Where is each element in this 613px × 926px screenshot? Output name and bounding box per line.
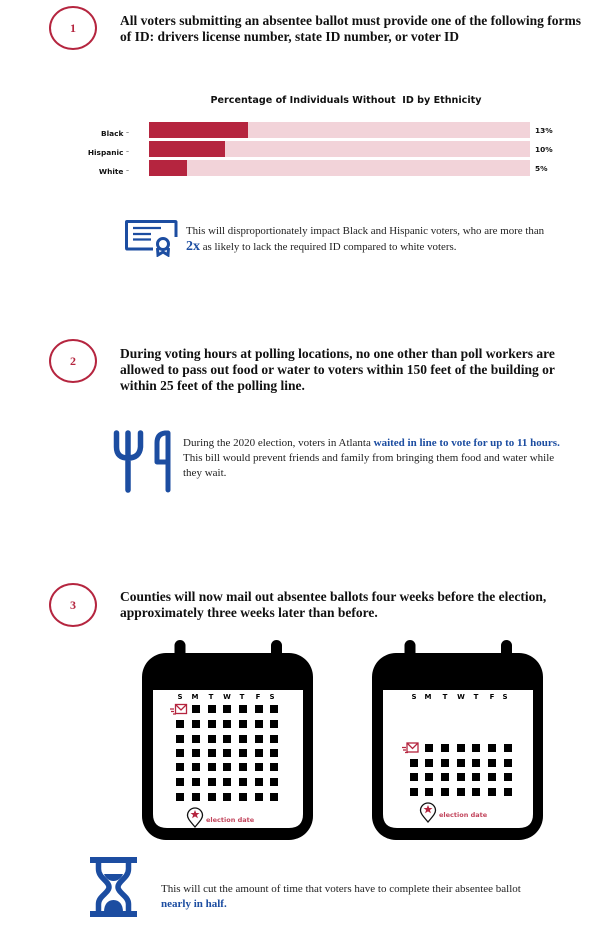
calendar: after: W xyxy=(457,693,465,701)
step 2 number badge: 2 xyxy=(70,354,76,368)
calendar: before: W xyxy=(223,693,231,701)
step 1 heading: of ID: drivers license number, state ID number, or voter ID xyxy=(120,29,459,44)
step 1 heading xyxy=(120,13,581,44)
calendar: before: election date xyxy=(206,816,255,824)
row: White 5%: White – xyxy=(99,167,129,176)
calendar: before: S xyxy=(177,693,183,701)
row: White 5% xyxy=(99,160,548,176)
calendar: after: election date xyxy=(439,811,488,819)
calendar: after: T xyxy=(443,693,448,701)
calendar: before: T xyxy=(209,693,214,701)
step 3 heading xyxy=(120,589,546,620)
calendar: after: S xyxy=(502,693,508,701)
ID impact text: This will disproportionately impact Black and Hispanic voters, who are more than xyxy=(186,225,544,237)
calendar: before: T xyxy=(240,693,245,701)
step 1 number badge: 1 xyxy=(70,21,76,35)
calendar: before: S xyxy=(269,693,275,701)
Atlanta wait text xyxy=(183,437,560,479)
step 3 heading: approximately three weeks later than before. xyxy=(120,605,378,620)
row: White 5%: 5% xyxy=(535,164,548,173)
row: Hispanic 10%: 10% xyxy=(535,145,553,154)
step 2 heading xyxy=(120,346,555,393)
calendar: before: F xyxy=(256,693,261,701)
step 2 heading: within 25 feet of the polling line. xyxy=(120,378,305,393)
nearly in half text xyxy=(161,883,521,910)
chart title: Percentage of Individuals Without ID by Ethnicity xyxy=(210,95,482,106)
step 2 heading: During voting hours at polling locations, no one other than poll workers are xyxy=(120,346,555,361)
row: Black 13%: Black – xyxy=(101,129,129,138)
step 3 number badge: 3 xyxy=(70,598,76,612)
ID impact text: 2x as likely to lack the required ID compared to white voters. xyxy=(186,239,456,254)
step 3 heading: Counties will now mail out absentee ballots four weeks before the election, xyxy=(120,589,546,604)
Atlanta wait text: they wait. xyxy=(183,467,226,479)
row: Black 13% xyxy=(101,122,553,138)
row: Hispanic 10% xyxy=(88,141,553,157)
calendar: before: M xyxy=(192,693,199,701)
calendar: after: T xyxy=(474,693,479,701)
icon: ID certificate xyxy=(125,220,178,257)
Atlanta wait text: This bill would prevent friends and family from bringing them food and water while xyxy=(183,452,554,464)
step 3 number badge xyxy=(49,583,97,627)
row: Hispanic 10%: Hispanic – xyxy=(88,148,129,157)
bar chart: percentage without ID by ethnicity xyxy=(88,122,553,176)
nearly in half text: This will cut the amount of time that voters have to complete their absentee ballot xyxy=(161,883,521,895)
calendar: after: S xyxy=(411,693,417,701)
icon: fork and knife xyxy=(114,430,170,493)
icon: hourglass xyxy=(90,857,137,917)
step 1 number badge xyxy=(49,6,97,50)
step 2 number badge xyxy=(49,339,97,383)
Atlanta wait text: During the 2020 election, voters in Atlanta waited in line to vote for up to 11 hours. xyxy=(183,437,560,449)
step 2 heading: allowed to pass out food or water to voters within 150 feet of the building or xyxy=(120,362,555,377)
nearly in half text: nearly in half. xyxy=(161,898,227,910)
calendar: after xyxy=(372,640,543,840)
step 1 heading: All voters submitting an absentee ballot must provide one of the following forms xyxy=(120,13,581,28)
calendar: after: F xyxy=(490,693,495,701)
row: Black 13%: 13% xyxy=(535,126,553,135)
calendar: before xyxy=(142,640,313,840)
calendar: after: M xyxy=(425,693,432,701)
ID impact text xyxy=(186,225,544,254)
